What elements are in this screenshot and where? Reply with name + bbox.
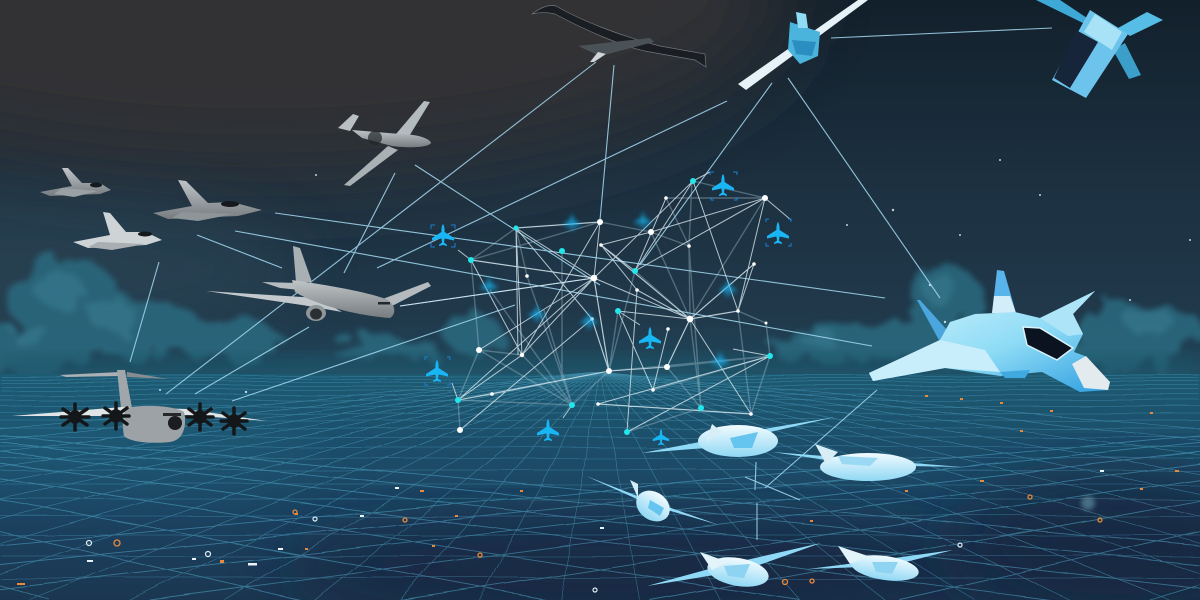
remote carrier 4: [647, 543, 821, 591]
target brackets: [425, 172, 791, 385]
data links between platforms: [130, 28, 1052, 540]
node dots: cyan: [455, 178, 773, 435]
main silhouette: [869, 291, 1110, 392]
aircraft: next generation fighter: [869, 270, 1110, 392]
remote carrier 3: [586, 476, 719, 528]
tracked aircraft icons: [426, 174, 789, 445]
digital perspective grid: [0, 372, 1200, 600]
network graph: [400, 172, 791, 445]
aircraft: Eurofighter 1: [40, 168, 111, 197]
satellite: observation: [1036, 0, 1163, 98]
aircraft: A400M transport: [12, 370, 267, 443]
clouds on horizon: [0, 258, 1200, 384]
aircraft: Eurofighter 3: [73, 212, 162, 250]
tail fins: [992, 270, 1016, 313]
remote carrier 2: [772, 444, 962, 481]
satellite: relay: [738, 0, 868, 90]
cockpit canopy: [1023, 327, 1073, 360]
stars and specks: [159, 159, 1191, 393]
remote carrier 5: [808, 546, 953, 585]
aircraft: A330 tanker: [206, 246, 431, 321]
sky background: [0, 0, 1200, 400]
ocean surface: [0, 374, 1200, 600]
nose: [1072, 356, 1110, 390]
aircraft: high altitude drone: [532, 5, 706, 67]
remote carrier 1: [642, 417, 835, 457]
ocean markers: [17, 395, 1179, 592]
bright network edges: [400, 172, 791, 432]
dim network edges: [458, 181, 770, 432]
propellers: [61, 403, 247, 434]
aircraft: MALE drone: [338, 101, 431, 186]
remote carrier swarm: [586, 417, 962, 591]
node dots: white: [457, 195, 768, 433]
aircraft: Eurofighter 2: [153, 180, 262, 221]
